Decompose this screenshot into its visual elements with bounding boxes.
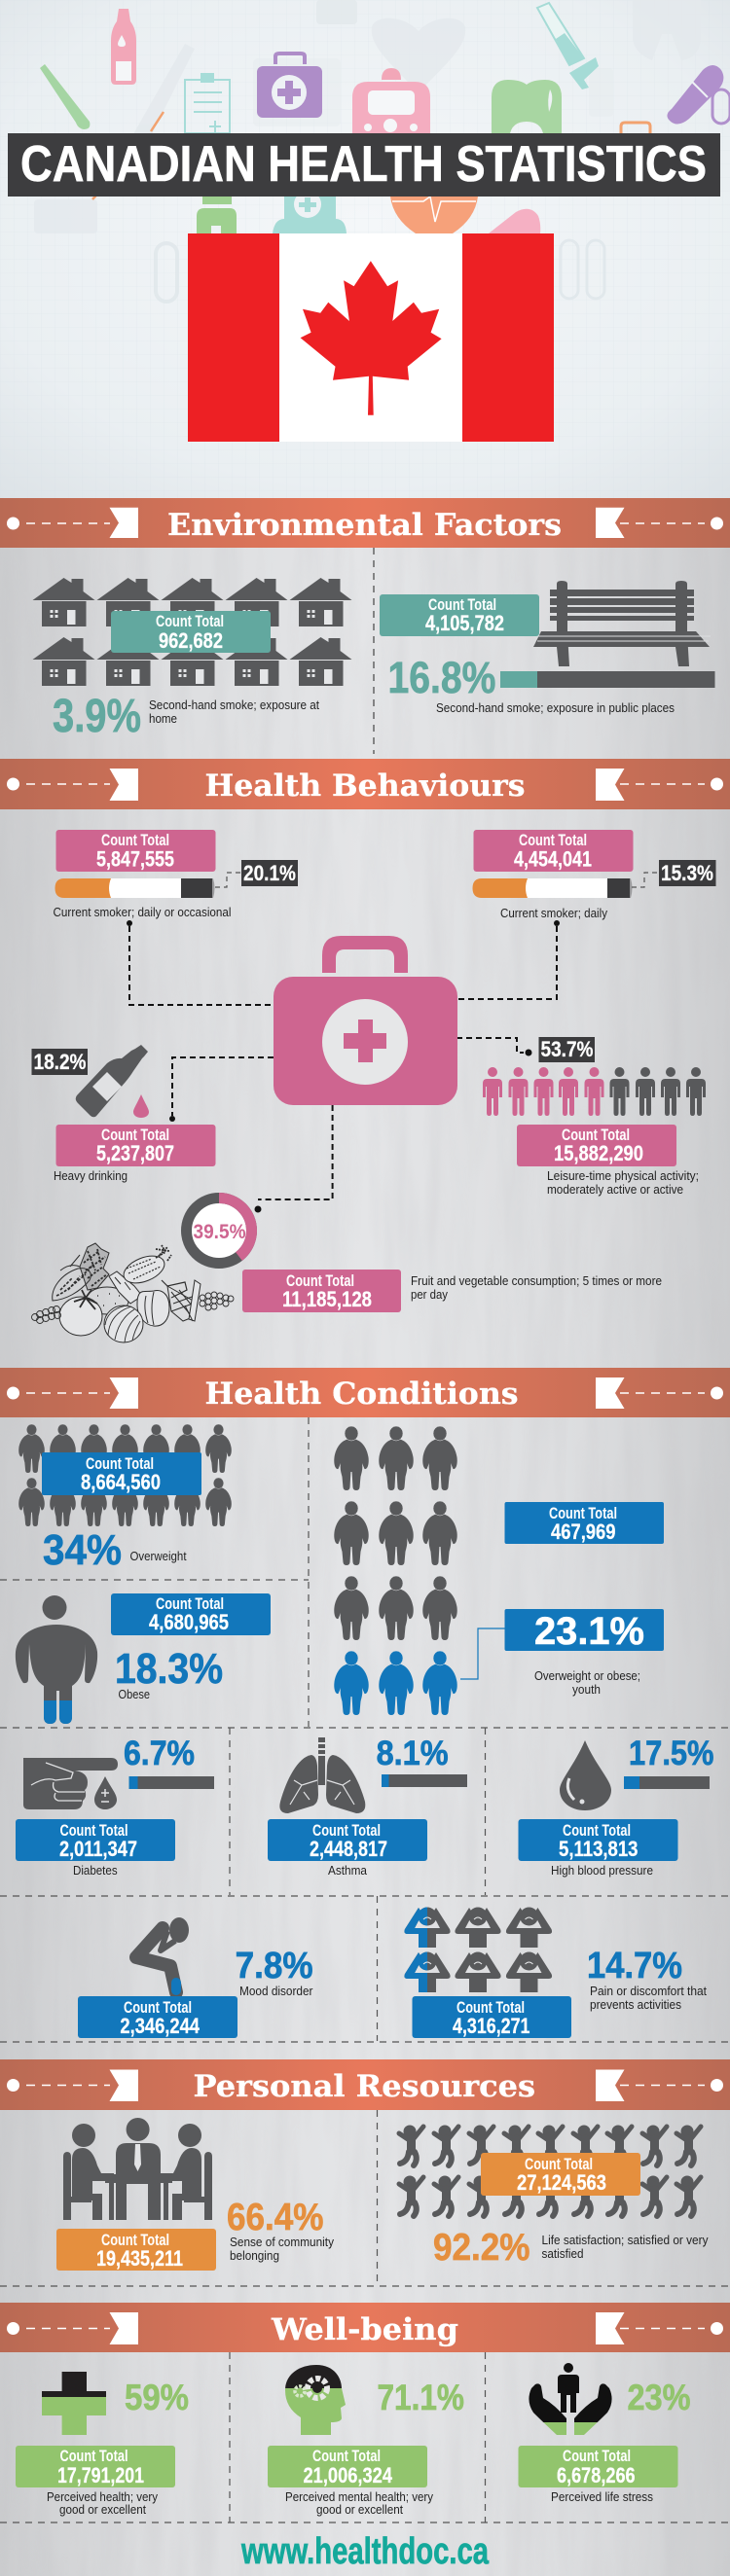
description [47, 2489, 158, 2517]
count box: Count Total [549, 1504, 617, 1522]
description: youth [572, 1682, 601, 1697]
panel: diabetes [16, 1735, 214, 1878]
description [285, 2489, 433, 2517]
percentage: 71.1% [378, 2378, 464, 2417]
panel: overweight [18, 1424, 232, 1574]
icon: teal cart [273, 191, 347, 233]
count box: Count Total [156, 612, 224, 630]
description: Heavy drinking [54, 1168, 128, 1183]
description: Perceived health; very [47, 2489, 158, 2504]
count box: 4,454,041 [514, 846, 592, 872]
description: Second-hand smoke; exposure at [149, 698, 319, 712]
banner: Environmental Factors: Environmental Factors [167, 508, 562, 543]
description [541, 2233, 709, 2261]
panel: perceived life stress [518, 2363, 691, 2504]
progress bar [500, 671, 714, 688]
count box: 15,882,290 [554, 1141, 643, 1165]
header background [0, 0, 730, 498]
header health icons [34, 0, 730, 302]
percentage: 66.4% [227, 2197, 323, 2238]
icon: cross [42, 2372, 106, 2435]
banner: Well-being [0, 2303, 730, 2352]
count box [504, 1502, 664, 1544]
connector [460, 1628, 505, 1679]
icon: orange case handle [621, 123, 650, 133]
count box: 27,124,563 [517, 2170, 606, 2195]
description: Pain or discomfort that [590, 1984, 707, 1998]
percentage box [504, 1609, 664, 1653]
icon: ambulance [352, 68, 430, 133]
icon: purple medical kit [257, 54, 322, 118]
count box [518, 2446, 677, 2487]
description [590, 1984, 707, 2012]
panel: high blood pressure [518, 1735, 714, 1878]
count box: 8,664,560 [81, 1470, 161, 1494]
count box: 11,185,128 [282, 1287, 372, 1311]
count box: Count Total [563, 2447, 631, 2465]
percentage box: 23.1% [534, 1610, 644, 1653]
banner: Health Behaviours [0, 759, 730, 809]
percentage: 17.5% [629, 1735, 714, 1772]
icon: hands holding person [529, 2363, 612, 2435]
panel: current smoker daily [473, 830, 716, 920]
count box: Count Total [156, 1594, 224, 1613]
icon: syringe [537, 3, 599, 89]
description: Overweight [130, 1549, 187, 1563]
icon: blood drop [560, 1740, 611, 1810]
description [411, 1273, 662, 1302]
description: Life satisfaction; satisfied or very [541, 2233, 709, 2247]
panel: overweight or obese youth [334, 1426, 664, 1715]
description: Overweight or obese; [534, 1668, 640, 1683]
donut chart [187, 1199, 251, 1263]
description: good or excellent [316, 2502, 403, 2517]
count box: 2,448,817 [310, 1837, 387, 1861]
count box: 19,435,211 [96, 2246, 183, 2271]
count box [242, 1270, 401, 1312]
percentage: 8.1% [377, 1735, 449, 1772]
count box: 4,680,965 [149, 1610, 229, 1634]
icon: green bottle [197, 197, 237, 233]
icon: bench [533, 581, 711, 666]
count box: 5,847,555 [96, 846, 174, 872]
icon: sad person [136, 1917, 189, 1992]
icon: medical kit [274, 936, 457, 1105]
percentage badge: 18.2% [33, 1050, 86, 1074]
description: Current smoker; daily [500, 906, 607, 920]
description [534, 1668, 640, 1697]
description: moderately active or active [547, 1182, 683, 1197]
count box: 2,346,244 [120, 2014, 201, 2038]
description: Fruit and vegetable consumption; 5 times or more [411, 1273, 662, 1288]
banner: Health Conditions: Health Conditions [204, 1377, 518, 1412]
footer URL: www.healthdoc.ca [240, 2531, 490, 2572]
icon: overweight people grid [18, 1424, 232, 1526]
description: belonging [230, 2248, 279, 2263]
percentage: 14.7% [587, 1946, 682, 1986]
progress bar [128, 1776, 214, 1789]
count box: 5,113,813 [559, 1837, 639, 1861]
Canadian flag [188, 233, 554, 442]
percentage: 3.9% [53, 691, 141, 742]
connector lines to medical kit [127, 920, 560, 1212]
icon: cigarette [55, 878, 214, 898]
panel: leisure-time physical activity [483, 1037, 706, 1197]
percentage badge: 15.3% [661, 861, 713, 885]
banner: Environmental Factors [0, 498, 730, 548]
description: prevents activities [590, 1997, 681, 2012]
count box: 962,682 [159, 628, 223, 653]
count box: Count Total [101, 831, 169, 849]
count box: Count Total [312, 2447, 381, 2465]
count box: Count Total [428, 595, 496, 614]
icon: lungs [279, 1737, 365, 1813]
panel: asthma [268, 1735, 467, 1878]
count box [56, 1125, 216, 1166]
icon: pink bottle [111, 9, 136, 85]
percentage badge: 53.7% [541, 1037, 594, 1061]
percentage: 18.3% [115, 1645, 223, 1693]
description: Current smoker; daily or occasional [53, 905, 232, 919]
icon: orange heart [390, 197, 478, 233]
panel: mood disorder [78, 1917, 313, 2038]
progress bar [624, 1776, 710, 1789]
panel: perceived health [16, 2372, 189, 2517]
icon: obese person [16, 1595, 97, 1724]
panel: heavy drinking [31, 1045, 216, 1183]
icon: pencil [92, 112, 164, 199]
percentage: 92.2% [433, 2227, 529, 2269]
count box [518, 1819, 677, 1861]
icon: people in pain [404, 1907, 552, 1992]
count box: Count Total [101, 1126, 169, 1144]
panel: second-hand smoke in public places [380, 581, 714, 715]
count box [111, 1593, 271, 1635]
icon: people row [483, 1067, 706, 1116]
description: Sense of community [230, 2235, 334, 2249]
description: Leisure-time physical activity; [547, 1168, 699, 1183]
count box: 2,011,347 [59, 1837, 137, 1861]
icon: clipboard [185, 74, 230, 133]
banner: Health Behaviours: Health Behaviours [204, 769, 526, 804]
count box [56, 830, 216, 872]
count box [268, 2446, 427, 2487]
count box [16, 2446, 175, 2487]
panel: current smoker daily or occasional [53, 830, 298, 919]
count box: Count Total [101, 2231, 169, 2249]
banner: Health Conditions [0, 1368, 730, 1417]
icon: drop [133, 1094, 149, 1118]
count box: 4,105,782 [425, 611, 504, 635]
panel: pain or discomfort [404, 1907, 707, 2038]
count box [380, 594, 539, 636]
count box: Count Total [563, 1821, 631, 1840]
icon: cigarette [473, 878, 633, 898]
description [547, 1168, 699, 1197]
icon: head with gears [285, 2365, 346, 2435]
icon: pink pill [489, 209, 540, 233]
icon: bottle [76, 1045, 148, 1117]
count box: Count Total [525, 2155, 593, 2173]
count box [16, 1819, 175, 1861]
panel: life satisfaction [399, 2125, 709, 2269]
icon: vegetables [31, 1243, 234, 1342]
banner: Well-being: Well-being [271, 2312, 458, 2347]
description: Perceived life stress [551, 2489, 653, 2504]
count box [268, 1819, 427, 1861]
panel: obese [16, 1593, 271, 1724]
count box: Count Total [312, 1821, 381, 1840]
icon: hand and drop [23, 1758, 118, 1809]
panel: perceived mental health [268, 2365, 464, 2517]
count box [481, 2153, 640, 2196]
count box [56, 2229, 216, 2271]
count box: Count Total [60, 1821, 128, 1840]
percentage: 16.8% [387, 653, 496, 702]
count box: Count Total [456, 1998, 525, 2017]
description: per day [411, 1287, 448, 1302]
percentage badge: 20.1% [243, 861, 296, 885]
count box: 4,316,271 [453, 2014, 529, 2038]
icon: tooth [492, 80, 562, 133]
percentage: 34% [43, 1526, 122, 1574]
progress bar [382, 1774, 467, 1787]
panel: second-hand smoke at home [33, 578, 352, 742]
description: Mood disorder [239, 1984, 313, 1998]
icon: thermometer [40, 64, 90, 129]
description [230, 2235, 334, 2263]
icon: happy people [399, 2125, 701, 2216]
panel: sense of community belonging [56, 2118, 334, 2271]
icon: houses [33, 578, 352, 686]
description: High blood pressure [551, 1863, 653, 1878]
percentage: 23% [627, 2378, 691, 2417]
count box [111, 611, 271, 653]
icon: pills [667, 65, 730, 125]
icon: meeting [63, 2118, 212, 2220]
donut chart: 39.5% [193, 1221, 246, 1243]
count box: Count Total [60, 2447, 128, 2465]
description: Obese [119, 1687, 150, 1701]
count box: Count Total [86, 1454, 154, 1473]
count box [78, 1996, 237, 2038]
description: satisfied [541, 2246, 584, 2261]
count box: 17,791,201 [57, 2463, 144, 2487]
description: home [149, 711, 177, 726]
count box [413, 1996, 571, 2038]
panel: fruit and vegetable consumption [31, 1199, 662, 1342]
count box [517, 1125, 676, 1166]
count box: Count Total [286, 1271, 354, 1290]
percentage: 59% [125, 2378, 189, 2417]
percentage: 6.7% [124, 1735, 195, 1772]
percentage: 7.8% [236, 1946, 313, 1986]
description [149, 698, 319, 726]
count box: Count Total [519, 831, 587, 849]
description: Asthma [328, 1863, 368, 1878]
description: Perceived mental health; very [285, 2489, 433, 2504]
count box: 6,678,266 [557, 2463, 636, 2487]
count box: Count Total [124, 1998, 192, 2017]
count box [473, 830, 633, 872]
count box: 5,237,807 [96, 1141, 174, 1165]
banner: Personal Resources: Personal Resources [193, 2069, 535, 2104]
count box [42, 1452, 201, 1495]
count box: 21,006,324 [304, 2463, 393, 2487]
description: Second-hand smoke; exposure in public places [436, 700, 675, 715]
description: good or excellent [59, 2502, 146, 2517]
count box: Count Total [562, 1126, 630, 1144]
icon: youth grid [334, 1426, 457, 1715]
banner: Personal Resources [0, 2059, 730, 2110]
description: Diabetes [73, 1863, 118, 1878]
count box: 467,969 [551, 1520, 615, 1544]
